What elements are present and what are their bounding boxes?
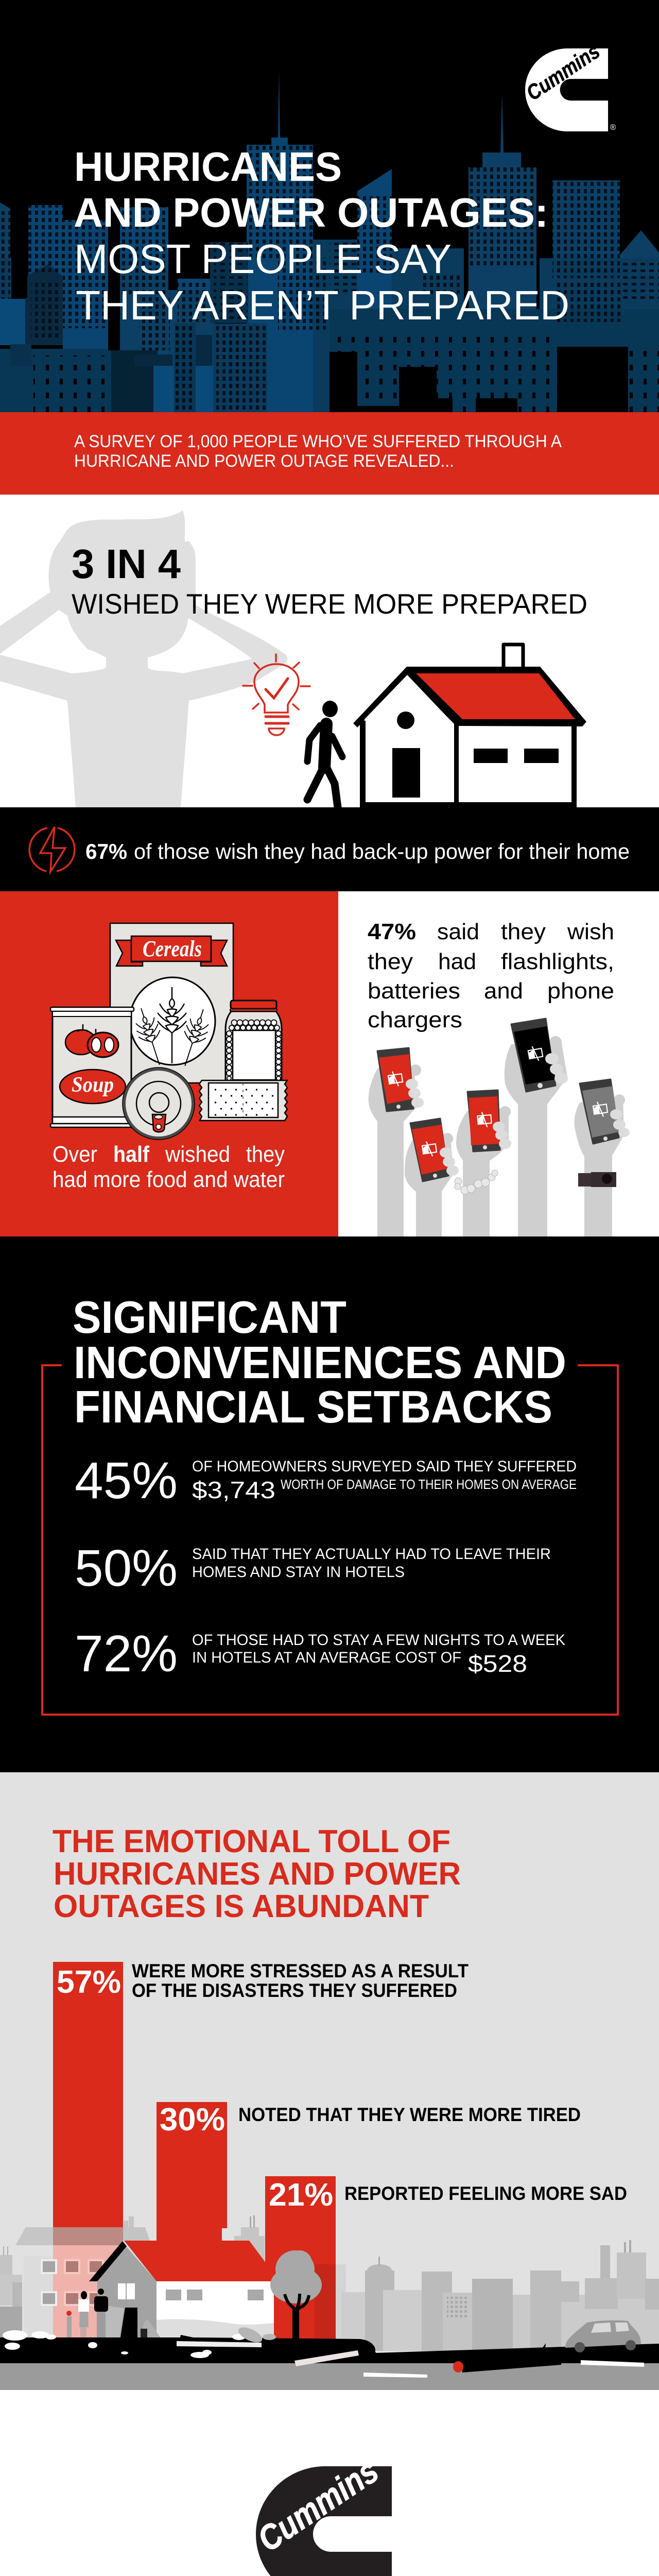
bar: 30% tired: NOTED THAT THEY WERE MORE TIRED [238,2104,581,2125]
panel: survey banner [0,412,659,495]
illustration: cereal box [110,923,233,1083]
bar: 21% sad: 21% [269,2177,333,2213]
bar: 21% sad: REPORTED FEELING MORE SAD [344,2183,627,2204]
scene: car [565,2320,641,2352]
text: over half: they [246,1142,285,1167]
bar: 57% stressed [53,1960,469,2228]
panel: inconveniences and setbacks [0,1236,659,1772]
text: over half: half [113,1142,149,1167]
bar: 57% stressed: WERE MORE STRESSED AS A RESULT [132,1960,469,1981]
heading: 3 in 4: WISHED THEY WERE MORE PREPARED [72,588,587,620]
title: HURRICANES [74,144,342,190]
scene: family [66,2289,108,2337]
stat: 45%: WORTH OF DAMAGE TO THEIR HOMES ON AVERAGE [281,1477,577,1492]
heading: HURRICANES AND POWER [54,1856,461,1892]
text: 47%: and [484,978,523,1004]
red frame [42,1365,618,1715]
skyline [0,69,659,412]
heading: INCONVENIENCES AND [74,1337,566,1388]
heading: FINANCIAL SETBACKS [74,1381,552,1432]
icon: red light bulb with check [243,654,310,735]
heading: 3 in 4: 3 IN 4 [72,541,181,587]
icon: walking person [307,701,342,807]
stat: 50%: 50% [75,1539,178,1597]
bar: 30% tired: 30% [160,2102,225,2138]
stat: 45%: $3,743 [192,1477,275,1503]
stat: 45% [75,1452,577,1510]
text: 47%: said [437,919,479,944]
panel: emotional toll [0,1772,659,2390]
panel: survey banner: HURRICANE AND POWER OUTAGE REVEALED... [74,451,454,471]
panel: flashlights and phones [338,891,659,1236]
scene: street and rubble [0,2324,659,2390]
scene: red roof house [89,2241,274,2338]
stat: 50%: HOMES AND STAY IN HOTELS [192,1564,405,1581]
logo: Cummins white: Cummins [522,39,604,105]
illustration: hand with red phone 2 [405,1118,459,1236]
illustration: hand with black phone [505,1019,568,1236]
scene: damaged apartment building [15,2227,123,2338]
panel: food and water [0,891,338,1236]
panel: footer [0,2390,659,2576]
illustration: crackers [199,1080,287,1121]
bar: 21% sad [265,2176,627,2340]
panel: survey banner: A SURVEY OF 1,000 PEOPLE WHO’VE SUFFERED THROUGH A [74,432,562,451]
scene: back skyline [0,2215,265,2339]
heading: OUTAGES IS ABUNDANT [54,1889,429,1924]
scene: right skyline [336,2240,659,2352]
stat: 50% [75,1539,551,1597]
text: 47%: 47% [368,919,416,944]
title [74,144,569,328]
text: over half: Over [53,1142,97,1167]
stat: 45%: OF HOMEOWNERS SURVEYED SAID THEY SUFFERED [192,1458,577,1475]
text: 47%: wish [567,919,614,944]
stat: 72% [75,1625,565,1683]
logo: Cummins white [522,39,616,132]
bar: 57% stressed: 57% [57,1964,121,2000]
heading: 3 in 4 [72,541,587,620]
logo: Cummins white: ® [610,123,616,132]
text: 47%: phone [547,978,614,1004]
stat: 72%: 72% [75,1625,178,1683]
stat: 45%: 45% [75,1452,178,1510]
illustration: soup can [50,1007,134,1127]
heading [73,1292,566,1432]
heading: THE EMOTIONAL TOLL OF [53,1824,450,1859]
panel: header [0,0,659,412]
scene: tree [270,2250,322,2339]
illustration: worried person silhouette [0,511,287,807]
illustration: soup can: Soup [72,1073,114,1097]
text: 47%: flashlights, [501,949,614,974]
text: 47%: chargers [368,1007,462,1032]
text: 47%: batteries [368,978,460,1004]
text: 47% [368,919,614,1032]
title: MOST PEOPLE SAY [74,236,452,282]
text: over half [53,1142,285,1192]
illustration: jar [226,1001,282,1081]
text: 47%: had [438,949,476,974]
icon: house [353,645,586,807]
logo: Cummins black: Cummins [251,2451,385,2559]
panel: back-up power [0,807,659,891]
stat: 72%: OF THOSE HAD TO STAY A FEW NIGHTS TO A WEEK [192,1632,565,1649]
text: 47%: they [368,949,413,974]
illustration: tin can [123,1067,195,1140]
bar: 57% stressed: OF THE DISASTERS THEY SUFFERED [132,1980,457,2001]
illustration: hand with red phone 3 and bracelet [455,1090,511,1236]
title: THEY AREN’T PREPARED [76,282,569,328]
illustration: cereal box: Cereals [143,936,202,961]
illustration: hand with red phone 1 [369,1048,424,1236]
stat: 72%: $528 [468,1650,527,1677]
illustration: hand with gray phone and watch [574,1079,630,1236]
title: AND POWER OUTAGES: [74,190,548,235]
panel: 3 in 4 [0,495,659,807]
stat: 72%: IN HOTELS AT AN AVERAGE COST OF [192,1649,461,1666]
text: over half: had more food and water [53,1167,285,1192]
text: 67% back-up power: 67% [85,839,127,863]
stat: 50%: SAID THAT THEY ACTUALLY HAD TO LEAVE THEIR [192,1546,551,1563]
icon: lightning bolt circle [29,827,75,872]
bar: 30% tired [157,2102,581,2241]
heading [53,1824,461,1924]
text: over half: wished [165,1142,230,1167]
heading: SIGNIFICANT [73,1292,346,1343]
text: 47%: they [501,919,546,944]
text: 67% back-up power: of those wish they had back-up power for their home [134,839,630,863]
